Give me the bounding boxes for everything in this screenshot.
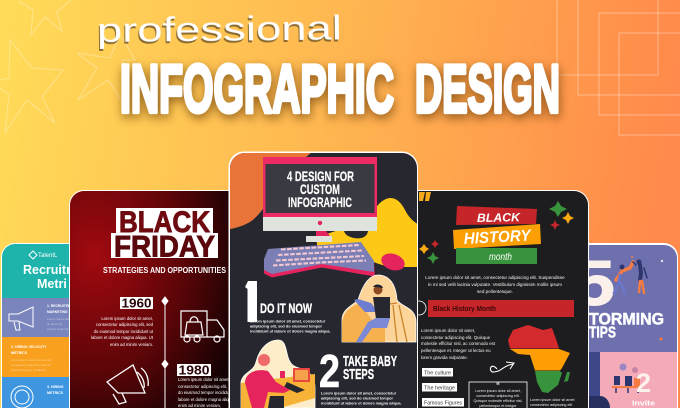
sparkles — [419, 201, 574, 264]
banner green: month — [489, 252, 512, 263]
big number 2: 2 — [636, 368, 651, 398]
row two label: 2. HIRING VELOCITY — [11, 345, 47, 349]
step number 2: 2 — [319, 345, 340, 397]
heading BLACK: BLACK — [119, 206, 210, 239]
red title bar: Black History Month — [433, 304, 496, 313]
step 1 text: adipiscing elit, sed do eiusmod tempor — [250, 324, 322, 328]
step number 1 — [245, 281, 257, 322]
monitor heading — [287, 168, 354, 210]
small column: consectetur adipiscing elit — [530, 403, 572, 407]
small column — [530, 398, 574, 407]
tag: famous figures — [422, 398, 464, 406]
left paragraph: consectetur adipiscing elit. Quisque — [421, 335, 491, 340]
step 1 text: Lorem ipsum dolor sit amet, consectetur — [250, 318, 326, 324]
intro paragraph: Lorem ipsum dolor sit amet, consectetur adipiscing elit. Suspendisse — [425, 275, 565, 280]
1980 text: Lorem ipsum dolor sit amet, — [178, 377, 230, 382]
corner accent — [419, 192, 431, 201]
heading line one: TORMING — [589, 310, 664, 328]
round marker — [412, 301, 426, 315]
quote box: Quisque molestie efficitur nisl, — [474, 399, 522, 403]
card: Black History Month — [412, 190, 589, 408]
coin icon — [11, 386, 33, 408]
row one text: sed do eiusmod — [47, 327, 69, 331]
heading BLACK — [116, 208, 213, 233]
Invite label: Invite — [632, 398, 655, 408]
row three label: 3. HIRING — [47, 385, 64, 389]
year 1980: 1980 — [178, 362, 210, 378]
left paragraph: molestie efficitur nisl, ac commodo est — [421, 341, 496, 346]
monitor heading: 4 DESIGN FOR — [287, 168, 354, 184]
row two text: consectetur adipiscing sed do — [11, 363, 51, 367]
quote box: pellentesque et integer — [479, 404, 517, 408]
banner red: BLACK — [477, 210, 521, 225]
1960 text: Lorem ipsum dolor sit amet, — [101, 316, 153, 321]
row two text — [11, 359, 52, 372]
1960 text: do eiusmod tempor incididunt ut — [94, 329, 154, 334]
main title: DESIGN — [415, 51, 560, 127]
banner green — [456, 248, 537, 264]
yellow blob — [316, 198, 418, 267]
row three sublabel: METRICS — [47, 391, 64, 395]
truck icon — [181, 311, 224, 342]
row two sublabel: METRICS — [11, 351, 28, 355]
step 2 text: Lorem ipsum dolor sit amet, consectetur — [321, 390, 397, 396]
monitor — [263, 157, 377, 242]
1960 text — [91, 316, 154, 347]
intro paragraph: in mi sed velit lacinia vulputate. Vestibulum dignissim mollis ipsum — [428, 282, 562, 287]
1980 text: enim ad minim veniam, — [178, 403, 221, 408]
heading FRIDAY: FRIDAY — [114, 230, 215, 264]
row one text: sit amet elit — [47, 322, 62, 326]
tag: heritage — [422, 383, 457, 392]
1960 text: labore et dolore magna aliqua. Ut — [91, 335, 154, 340]
monitor heading: CUSTOM — [300, 181, 340, 197]
card: Black Friday — [69, 190, 235, 408]
teal header — [2, 244, 69, 298]
people high five — [614, 260, 647, 294]
1960 text: consectetur adipiscing elit, sed — [96, 322, 154, 327]
mouse — [379, 251, 407, 273]
subtitle: STRATEGIES AND OPPORTUNITIES — [103, 266, 227, 275]
card: 4 design for custom infographic — [228, 152, 418, 408]
tag: famous figures: Famous Figures — [424, 400, 462, 406]
timeline — [162, 297, 168, 408]
card: brainstorming tips — [589, 243, 678, 408]
tag: culture — [422, 368, 453, 376]
heading line two: TIPS — [589, 324, 616, 342]
intro paragraph — [425, 275, 565, 294]
1980 text — [178, 378, 228, 408]
pink section — [600, 352, 680, 408]
1980 text: consectetur adipiscing elit, — [178, 384, 227, 389]
1960 text: enim ad minim veniam. — [110, 342, 153, 347]
accent dots — [631, 256, 662, 340]
orange blob — [230, 153, 311, 229]
tag: culture: The culture — [424, 370, 451, 376]
map of Africa — [508, 325, 570, 393]
blue row — [2, 377, 69, 408]
step title: take baby steps — [343, 354, 397, 383]
step title: do it now: DO IT NOW — [260, 301, 312, 316]
monitor heading: INFOGRAPHIC — [288, 194, 352, 210]
card title: Recruitr — [23, 263, 71, 277]
purple row — [2, 298, 69, 337]
navy blob — [580, 396, 610, 408]
megaphone icon — [107, 365, 148, 404]
banner red — [456, 206, 537, 225]
row one text — [47, 318, 69, 330]
quote box: Lorem ipsum dolor sit amet, — [475, 389, 521, 393]
row one label: 1. RECRUITER — [47, 304, 71, 308]
illustration: person at desk — [241, 340, 315, 408]
logo mark — [29, 251, 37, 259]
card subtitle: Metri — [37, 277, 67, 291]
team illustration — [612, 364, 642, 393]
script heading: professional: professional — [97, 9, 342, 50]
tag: heritage: The heritage — [424, 386, 455, 392]
left paragraph — [421, 328, 496, 360]
big number 5: 5 — [574, 247, 615, 319]
navy section — [589, 352, 600, 396]
left paragraph: Lorem ipsum dolor sit amet, — [421, 328, 475, 333]
row two text: eiusmod tempor incididunt — [11, 368, 46, 372]
main title: INFOGRAPHIC — [120, 51, 394, 127]
card: recruitment metrics — [0, 243, 75, 408]
row one sublabel: MARKETING — [47, 310, 68, 314]
1980 text: do eiusmod tempor incididunt — [178, 390, 234, 395]
step 1 text — [250, 318, 331, 334]
megaphone icon — [9, 307, 33, 330]
row two text: Lorem ipsum dolor sit amet elit — [11, 358, 52, 362]
banner orange — [453, 224, 541, 249]
red title bar — [428, 300, 574, 317]
step 2 text: incididunt ut labore et dolore magna aliqua. — [321, 400, 402, 406]
intro paragraph: sed pellentesque. — [477, 289, 513, 294]
year 1960: 1960 — [122, 296, 152, 310]
left paragraph: lorem gravida vulputate. — [421, 355, 468, 360]
quote box: “ — [496, 381, 500, 390]
banner orange: HISTORY — [463, 227, 532, 248]
quote box: consectetur adipiscing elit. — [476, 394, 520, 398]
curly arrow — [490, 362, 514, 372]
quote box — [469, 381, 527, 408]
keyboard — [264, 242, 375, 278]
small column: Lorem ipsum dolor sit amet — [530, 398, 574, 402]
decorative stars — [0, 0, 135, 133]
dark notch — [344, 231, 368, 238]
step title: take baby steps: TAKE BABY — [343, 354, 397, 370]
small dots — [661, 260, 663, 262]
decorative squares — [557, 0, 680, 135]
step 2 text: adipiscing elit, sed do eiusmod tempor — [321, 396, 393, 400]
step 2 text — [321, 390, 402, 406]
row one text: Lorem ipsum dolor — [47, 317, 72, 321]
orange row — [2, 337, 69, 377]
left paragraph: pellentesque et. Integer ut lectus eu — [421, 348, 491, 353]
step 1 text: incididunt ut labore et dolore magna aliqua. — [250, 328, 331, 334]
1980 text: labore et dolore magna aliqua — [178, 397, 234, 402]
step title: take baby steps: STEPS — [343, 367, 374, 383]
illustration: person at laptop — [342, 275, 416, 342]
logo text: TalentL — [38, 253, 58, 259]
